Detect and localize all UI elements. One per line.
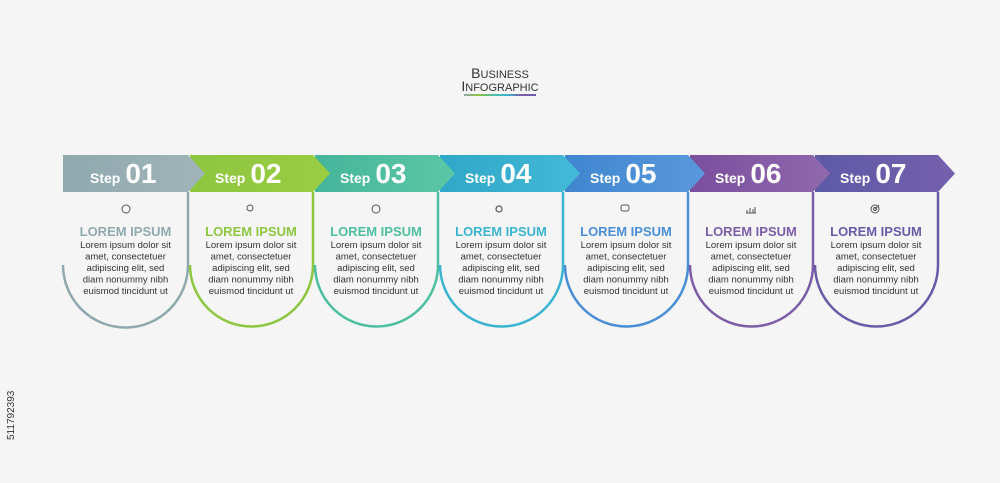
banner: step arrows: Step04 [465,158,532,189]
panel: step 7: adipiscing elit, sed [837,263,915,274]
panel: step 3: euismod tincidunt ut [334,286,419,297]
panel: step 1: diam nonummy nibh [83,274,168,286]
panel: step 1: Lorem ipsum dolor sit [80,240,171,251]
banner: step arrows: Step07 [840,158,906,189]
icon: money [372,205,380,213]
panel: step 2: adipiscing elit, sed [212,263,290,274]
icon: handshake [621,205,629,211]
panel: step 6: adipiscing elit, sed [712,263,790,274]
panel: step 5: adipiscing elit, sed [587,263,665,274]
panel: step 5: Lorem ipsum dolor sit [581,240,672,251]
icon: chart [746,207,756,213]
panel: step 3: diam nonummy nibh [333,274,419,286]
panel: step 6: amet, consectetuer [711,252,791,262]
icon: head [122,205,130,213]
panel: step 7: amet, consectetuer [836,252,916,262]
icon: target [871,205,879,213]
panel: step 5: LOREM IPSUM [580,224,672,239]
panel: step 5 [565,192,688,326]
panel: step 1: euismod tincidunt ut [83,286,168,297]
panel: step 6: LOREM IPSUM [705,224,797,239]
panel: step 5: diam nonummy nibh [583,274,669,286]
panel: step 3: LOREM IPSUM [330,224,422,239]
panel: step 3: Lorem ipsum dolor sit [331,240,422,251]
title: BUSINESS [471,65,529,81]
icon: search [247,205,253,211]
panel: step 4: diam nonummy nibh [458,274,544,286]
panel: step 3 [315,192,438,326]
panel: step 6: diam nonummy nibh [708,274,794,286]
panel: step 2: Lorem ipsum dolor sit [206,240,297,251]
panel: step 7: LOREM IPSUM [830,224,922,239]
panel: step 1 [63,192,188,328]
panel: step 4: adipiscing elit, sed [462,263,540,274]
banner: step arrows: Step03 [340,158,406,189]
banner: step arrows: Step01 [90,158,156,189]
panel: step 6: Lorem ipsum dolor sit [706,240,797,251]
panel: step 7: euismod tincidunt ut [834,286,919,297]
panel: step 6 [690,192,813,326]
side label: 511792393 [6,390,17,440]
panel: step 7: Lorem ipsum dolor sit [831,240,922,251]
title [461,65,539,96]
panel: step 4: LOREM IPSUM [455,224,547,239]
panel: step 2: euismod tincidunt ut [209,286,294,297]
panel: step 3: adipiscing elit, sed [337,263,415,274]
panel: step 4: euismod tincidunt ut [459,286,544,297]
banner: step arrows: Step02 [215,158,282,189]
panel: step 3: amet, consectetuer [336,252,416,262]
panel: step 1: amet, consectetuer [85,252,166,262]
panel: step 5: amet, consectetuer [586,252,666,262]
panel: step 7: diam nonummy nibh [833,274,919,286]
panel: step 1: adipiscing elit, sed [87,263,164,274]
panel: step 2 [190,192,313,326]
banner: step arrows: Step06 [715,158,782,189]
panel: step 5: euismod tincidunt ut [584,286,669,297]
panel: step 2: diam nonummy nibh [208,274,294,286]
panel: step 7 [815,192,938,326]
icon: gears [496,206,502,212]
panel: step 4: amet, consectetuer [461,252,541,262]
panel: step 4: Lorem ipsum dolor sit [456,240,547,251]
panel: step 2: LOREM IPSUM [205,224,297,239]
panel: step 6: euismod tincidunt ut [709,286,794,297]
banner: step arrows [63,155,955,192]
title: INFOGRAPHIC [461,78,539,94]
panel: step 2: amet, consectetuer [211,252,291,262]
banner: step arrows: Step05 [590,158,656,189]
panel: step 4 [440,192,563,326]
panel: step 1: LOREM IPSUM [80,224,171,239]
